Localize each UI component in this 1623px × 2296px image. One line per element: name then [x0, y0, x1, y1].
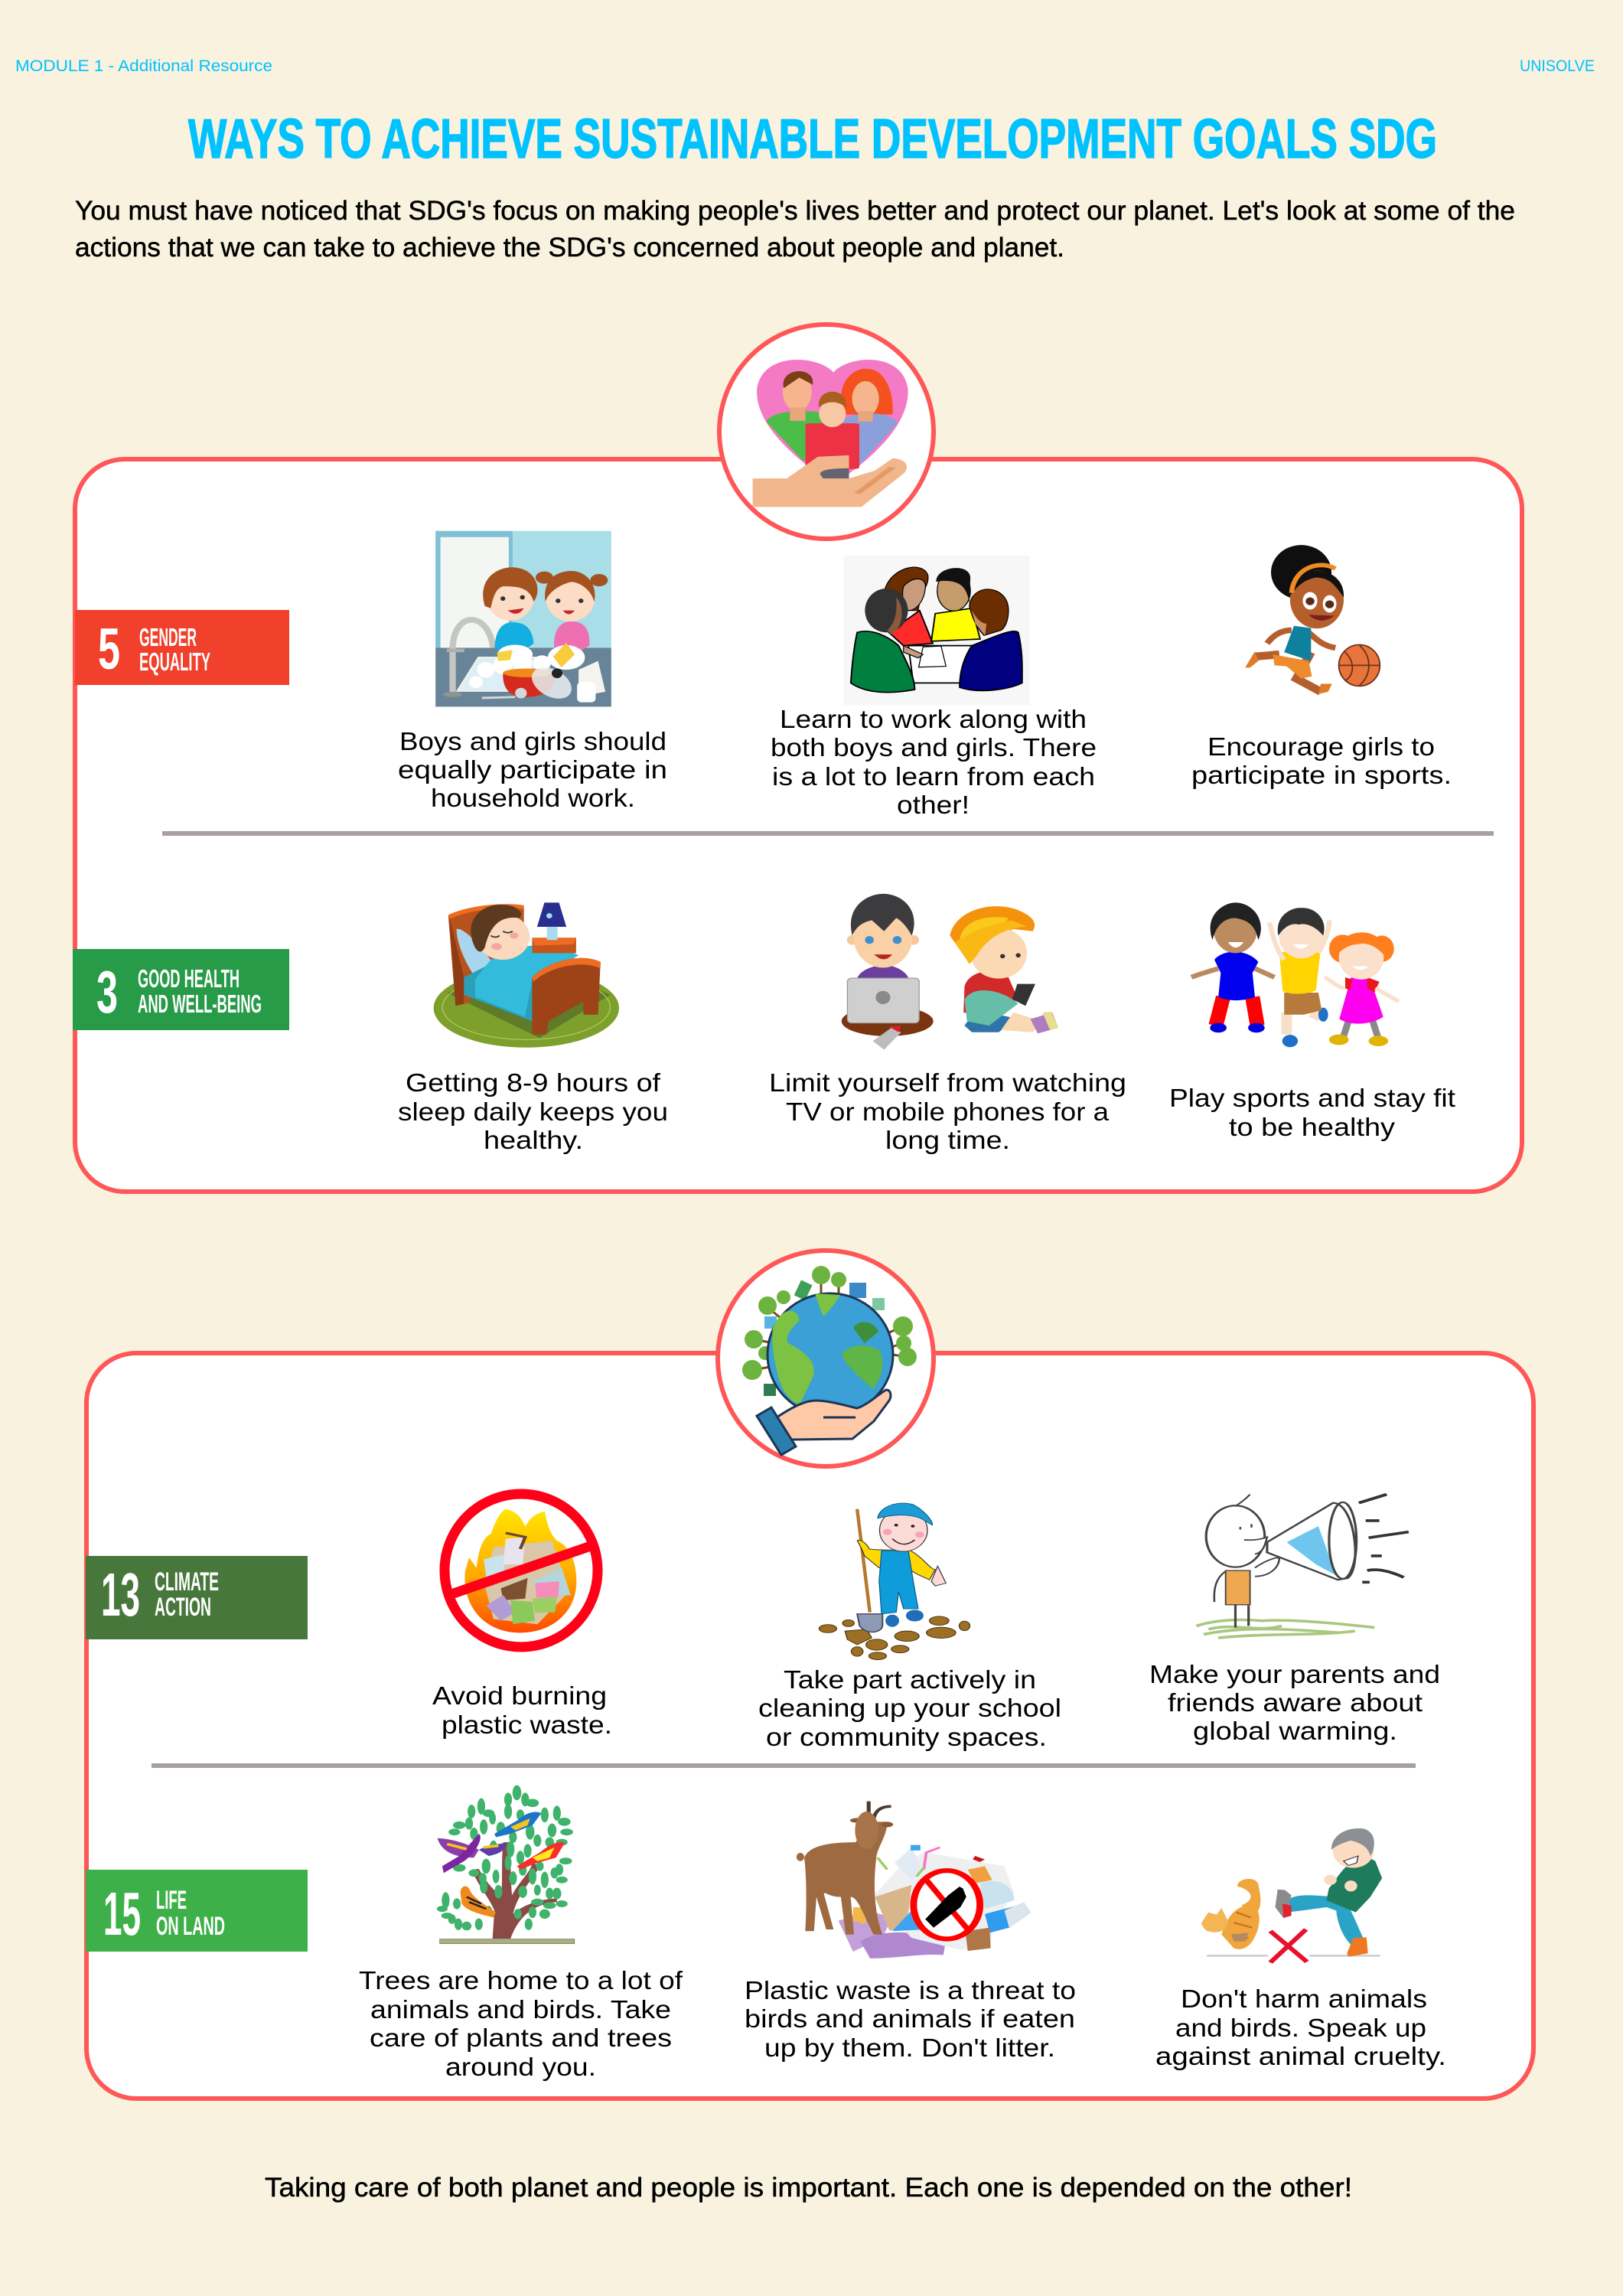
- caption: play sports: Play sports and stay fit: [1169, 1084, 1455, 1112]
- icon: boys and girls working together: [843, 556, 1030, 705]
- caption: household work: equally participate in: [398, 755, 667, 784]
- caption: raise awareness: global warming.: [1193, 1717, 1397, 1745]
- caption: sleep: [398, 1068, 668, 1154]
- caption: avoid burning plastic: [432, 1681, 612, 1739]
- caption: clean up spaces: or community spaces.: [766, 1723, 1047, 1751]
- SDG badge: 3 good health: [73, 949, 289, 1030]
- panel: planet: [86, 1251, 1533, 2099]
- SDG badge: 13 climate action: ACTION: [155, 1593, 211, 1622]
- intro paragraph: You must have noticed that SDG's focus on making people's lives better and protect our planet. Let's look at some of the: [75, 196, 1515, 226]
- footer message: Taking care of both planet and people is important. Each one is depended on the other!: [265, 2173, 1352, 2203]
- icon: three children playing: [1191, 902, 1399, 1047]
- caption: household work: Boys and girls should: [399, 727, 666, 755]
- panel: people: [73, 325, 1522, 1192]
- icon: tree with birds: [437, 1786, 575, 1944]
- caption: sleep: healthy.: [484, 1126, 583, 1154]
- caption: trees are home: care of plants and trees: [370, 2024, 672, 2052]
- caption: trees are home: [359, 1966, 683, 2081]
- SDG badge: 3 good health: GOOD HEALTH: [138, 964, 240, 993]
- caption: plastic waste threat: [745, 1976, 1076, 2062]
- SDG badge: 15 life on land: ON LAND: [156, 1912, 225, 1941]
- caption: raise awareness: Make your parents and: [1149, 1660, 1440, 1688]
- caption: limit screen time: TV or mobile phones for a: [786, 1097, 1110, 1126]
- icon: children using laptop and phone: [842, 894, 1058, 1050]
- caption: work together: [771, 705, 1097, 819]
- caption: raise awareness: friends aware about: [1168, 1688, 1423, 1717]
- caption: play sports: [1169, 1084, 1455, 1141]
- header: brand label: UNISOLVE: [1520, 57, 1595, 75]
- caption: limit screen time: long time.: [885, 1126, 1010, 1154]
- intro paragraph: actions that we can take to achieve the SDG's concerned about people and planet.: [75, 233, 1064, 263]
- caption: plastic waste threat: birds and animals if eaten: [745, 2004, 1075, 2033]
- icon: boy with shovel cleaning up: [819, 1503, 970, 1660]
- SDG badge: 3 good health: AND WELL-BEING: [138, 990, 262, 1018]
- icon: kids washing dishes: [435, 531, 611, 706]
- caption: plastic waste threat: up by them. Don't litter.: [764, 2033, 1055, 2062]
- caption: work together: other!: [897, 791, 970, 819]
- SDG badge: 3 good health: 3: [96, 958, 118, 1026]
- SDG badge: 5 gender equality: 5: [98, 617, 120, 682]
- caption: avoid burning plastic: Avoid burning: [432, 1681, 607, 1710]
- icon: child sleeping in bed: [434, 902, 619, 1048]
- caption: trees are home: Trees are home to a lot of: [359, 1966, 683, 1994]
- icon: no burning plastic: [445, 1494, 598, 1647]
- caption: sleep: Getting 8-9 hours of: [406, 1068, 661, 1097]
- SDG badge: 5 gender equality: EQUALITY: [139, 647, 210, 676]
- caption: raise awareness: [1149, 1660, 1440, 1745]
- caption: limit screen time: [769, 1068, 1126, 1154]
- caption: encourage girls: [1191, 732, 1452, 789]
- caption: trees are home: around you.: [445, 2053, 596, 2081]
- round badge: family in heart and hand: [719, 325, 934, 539]
- caption: clean up spaces: Take part actively in: [784, 1665, 1036, 1694]
- caption: clean up spaces: cleaning up your school: [758, 1694, 1061, 1722]
- SDG badge: 13 climate action: CLIMATE: [155, 1567, 219, 1596]
- caption: work together: both boys and girls. There: [771, 733, 1097, 762]
- caption: work together: is a lot to learn from each: [772, 762, 1095, 791]
- SDG badge: 13 climate action: [86, 1556, 308, 1639]
- caption: limit screen time: Limit yourself from watching: [769, 1068, 1126, 1097]
- caption: sleep: sleep daily keeps you: [398, 1097, 668, 1126]
- round badge: hand holding earth: [718, 1251, 934, 1466]
- caption: household work: [398, 727, 667, 812]
- panel frame: people: [75, 459, 1522, 1192]
- SDG badge: 5 gender equality: [75, 610, 289, 685]
- SDG badge: 13 climate action: 13: [101, 1561, 140, 1629]
- caption: plastic waste threat: Plastic waste is a threat to: [745, 1976, 1076, 2004]
- intro paragraph: [75, 196, 1515, 263]
- icon: figure shouting through megaphone: [1196, 1495, 1409, 1638]
- caption: household work: household work.: [431, 784, 635, 812]
- caption: avoid burning plastic: plastic waste.: [442, 1711, 612, 1739]
- icon: goat beside plastic waste with no bottle sign: [797, 1802, 1031, 1958]
- panel frame: planet: [86, 1353, 1533, 2099]
- icon: girl playing basketball: [1245, 545, 1380, 694]
- caption: don't harm animals: Don't harm animals: [1181, 1985, 1427, 2013]
- caption: play sports: to be healthy: [1229, 1113, 1396, 1141]
- caption: don't harm animals: [1155, 1985, 1446, 2070]
- caption: clean up spaces: [758, 1665, 1061, 1751]
- icon: boy kicking cat with red cross: [1201, 1828, 1382, 1962]
- caption: trees are home: animals and birds. Take: [370, 1995, 671, 2024]
- divider: [162, 831, 1494, 836]
- caption: encourage girls: Encourage girls to: [1207, 732, 1435, 761]
- divider: [152, 1763, 1416, 1768]
- SDG badge: 15 life on land: [86, 1870, 308, 1952]
- caption: encourage girls: participate in sports.: [1191, 761, 1452, 789]
- header: module label: MODULE 1 - Additional Resource: [15, 57, 272, 75]
- caption: don't harm animals: against animal cruelty.: [1155, 2042, 1446, 2070]
- SDG badge: 15 life on land: LIFE: [156, 1886, 187, 1915]
- caption: don't harm animals: and birds. Speak up: [1175, 2014, 1426, 2042]
- caption: work together: Learn to work along with: [780, 705, 1087, 733]
- SDG badge: 5 gender equality: GENDER: [139, 623, 197, 651]
- SDG badge: 15 life on land: 15: [103, 1880, 141, 1948]
